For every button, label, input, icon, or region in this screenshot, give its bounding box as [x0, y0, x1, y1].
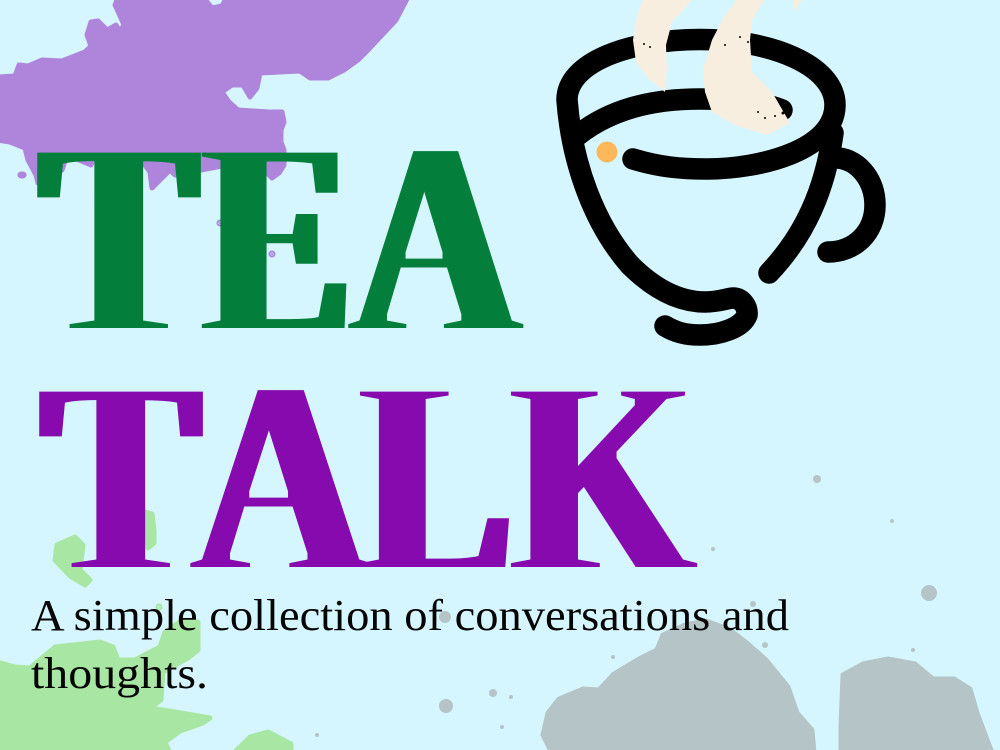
green paint splash [0, 512, 291, 750]
inner rim arc [578, 99, 782, 135]
steam speckles [643, 36, 784, 119]
heading: TALK: L [362, 323, 513, 630]
right side of bowl [769, 133, 833, 273]
cup handle [828, 158, 875, 252]
icon: orange dot [596, 142, 618, 162]
icon: steam [633, 0, 802, 135]
heading: TALK: T [42, 323, 200, 630]
subtitle [31, 591, 789, 698]
heading: TEA: T [40, 84, 198, 391]
subtitle: A simple collection of conversations and [31, 591, 789, 640]
heading: TALK: A [194, 323, 367, 630]
purple paint splash [0, 0, 408, 255]
icon: tea cup [567, 40, 875, 335]
heading: TEA [40, 84, 519, 391]
heading: TEA: A [352, 84, 519, 391]
grey paint splash [315, 475, 992, 750]
heading: TEA: E [204, 84, 352, 391]
subtitle: thoughts. [31, 649, 208, 698]
cup rim and bowl [567, 40, 835, 335]
heading: TALK: K [513, 323, 694, 630]
heading: TALK [42, 323, 694, 630]
